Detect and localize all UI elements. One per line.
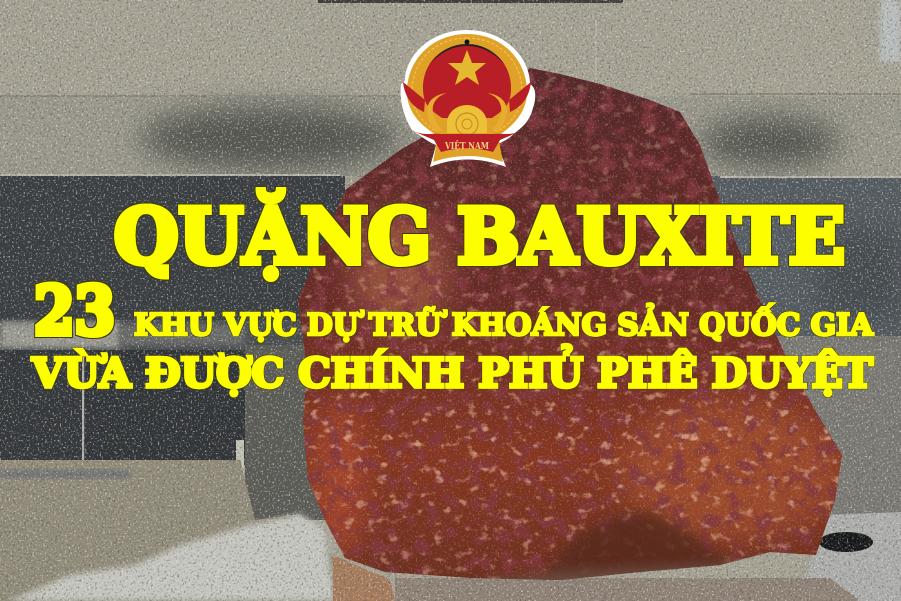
upper middle course	[0, 96, 901, 176]
title: QUẶNG BAUXITE: QUẶNG BAUXITE	[114, 189, 845, 281]
cavity shadow under rock	[544, 506, 734, 580]
emblem name: VIỆT NAM	[444, 140, 489, 152]
stone base	[333, 555, 395, 601]
subtitle line one: KHU VỰC DỰ TRỮ KHOÁNG SẢN QUỐC GIA	[134, 303, 874, 343]
golden cogwheel	[447, 105, 487, 133]
rice sprigs	[427, 93, 447, 133]
dark pan	[819, 532, 873, 552]
rock of bauxite ore	[290, 60, 850, 601]
ground	[0, 460, 335, 601]
sand pile	[8, 514, 335, 601]
emblem white border	[401, 30, 535, 167]
right floor	[800, 512, 901, 601]
top plaque shadow	[318, 0, 623, 3]
gold star	[448, 50, 486, 85]
mortar lines	[0, 20, 901, 480]
red banner	[413, 131, 521, 152]
national emblem of Vietnam	[401, 30, 535, 167]
subtitle line two: VỪA ĐƯỢC CHÍNH PHỦ PHÊ DUYỆT	[31, 346, 873, 397]
red side ribbons	[403, 82, 425, 112]
number: 23: 23	[34, 272, 115, 350]
red disc	[423, 45, 511, 118]
wheat wreath	[407, 34, 527, 162]
lower wall dark courses	[0, 176, 345, 322]
black crescent	[430, 44, 504, 64]
